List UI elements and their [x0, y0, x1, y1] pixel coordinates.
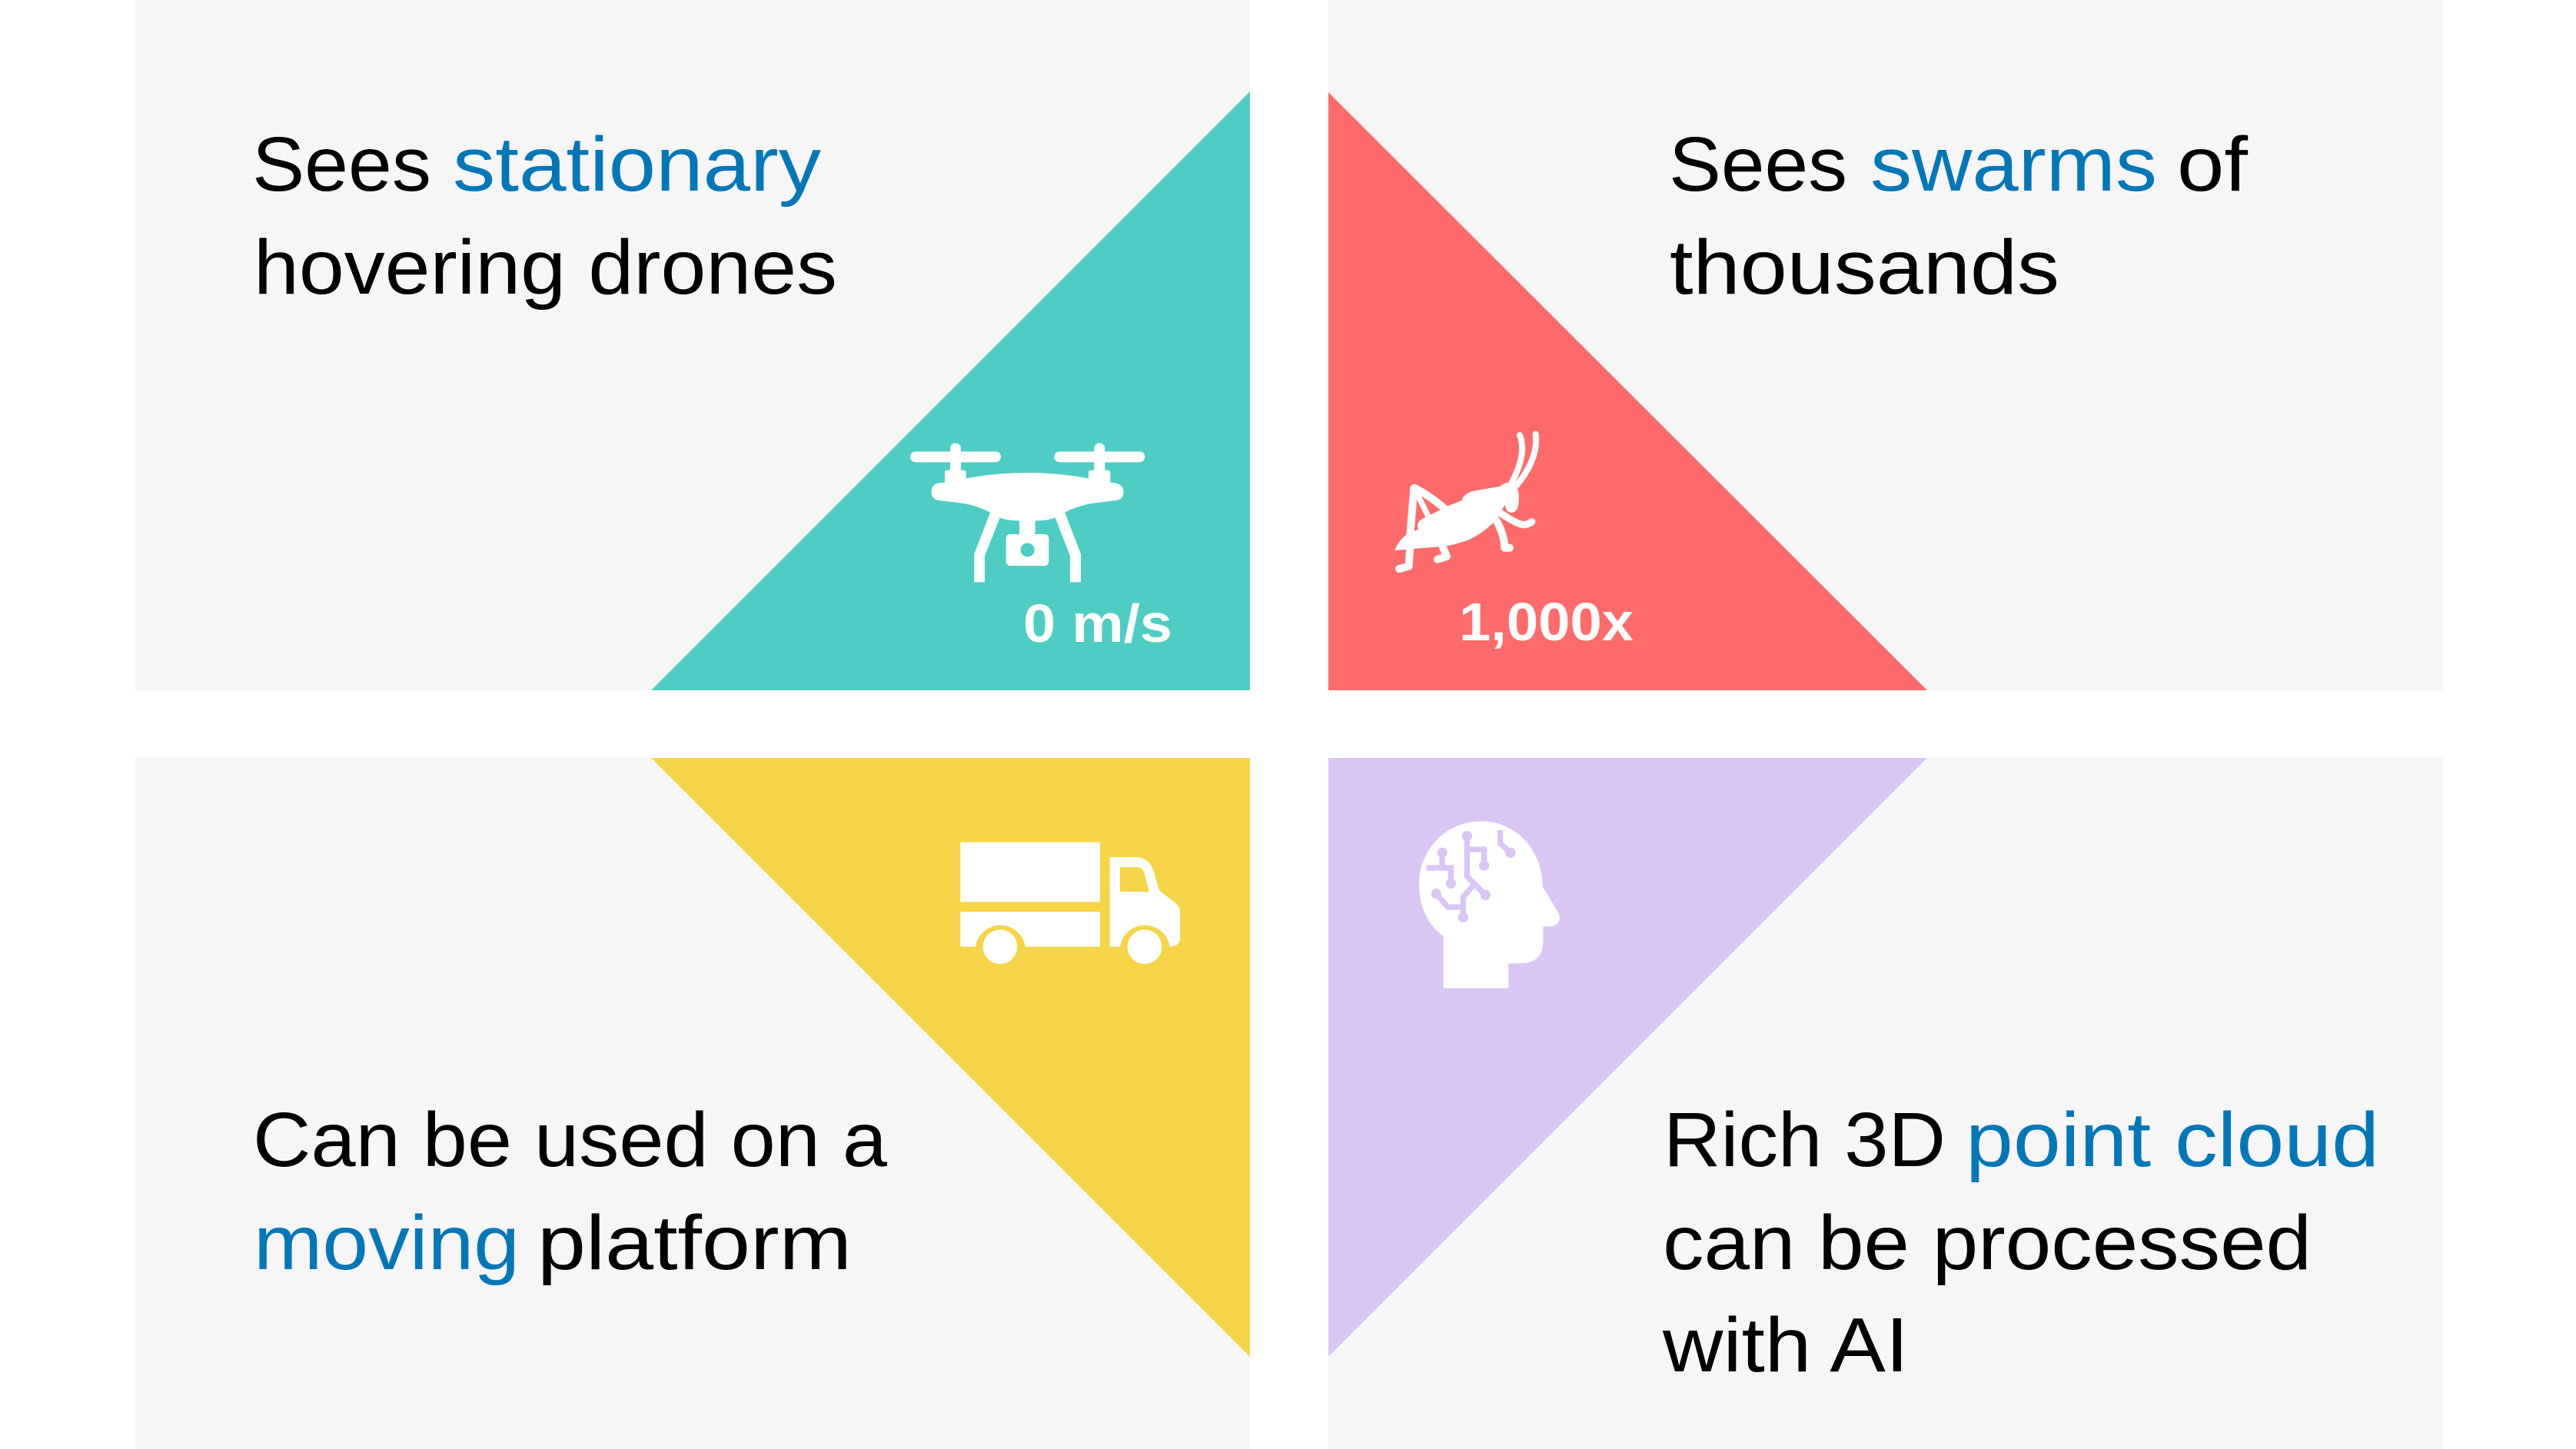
panel: moving platform — [135, 758, 1250, 1449]
panel background: bottom left — [135, 758, 1250, 1449]
panel: stationary drones — [135, 0, 1250, 690]
panel background: top left — [135, 0, 1250, 690]
text: rich 3D point cloud can be processed with AI: with AI — [1662, 1302, 1909, 1388]
text: rich 3D point cloud can be processed with AI: can be processed — [1663, 1200, 2312, 1286]
panel: point cloud with AI — [1328, 758, 2443, 1449]
label: 0 m/s: 0 m/s — [1023, 593, 1172, 653]
panel background: top right — [1328, 0, 2443, 690]
text: can be used on a moving platform: moving — [254, 1200, 520, 1286]
text: sees swarms of thousands — [1669, 121, 2248, 311]
text: rich 3D point cloud can be processed with AI: point cloud — [1966, 1097, 2379, 1183]
text: can be used on a moving platform: Can be used on a — [253, 1097, 887, 1183]
icon: AI head — [1419, 821, 1560, 989]
text: sees stationary hovering drones: Sees — [252, 121, 431, 208]
text: sees swarms of thousands: swarms — [1870, 121, 2157, 208]
text: rich 3D point cloud can be processed with AI: Rich 3D — [1664, 1097, 1946, 1183]
text: sees stationary hovering drones: hovering drones — [254, 224, 837, 311]
text: sees swarms of thousands: thousands — [1670, 224, 2059, 311]
label: 1,000x: 1,000x — [1459, 592, 1634, 652]
panel: swarms — [1328, 0, 2443, 690]
text: can be used on a moving platform — [253, 1097, 887, 1286]
red triangle — [1328, 92, 1927, 690]
text: sees swarms of thousands: Sees — [1669, 121, 1847, 208]
icon: grasshopper — [1394, 434, 1536, 569]
text: rich 3D point cloud can be processed with AI — [1662, 1097, 2379, 1388]
panel background: bottom right — [1328, 758, 2443, 1449]
icon: truck — [960, 842, 1180, 964]
icon: drone — [910, 443, 1145, 582]
text: sees stationary hovering drones — [252, 121, 837, 311]
purple triangle — [1328, 758, 1927, 1357]
text: can be used on a moving platform: platform — [537, 1200, 852, 1286]
text: sees swarms of thousands: of — [2177, 121, 2248, 208]
teal triangle — [651, 91, 1250, 690]
yellow triangle — [651, 758, 1250, 1357]
text: sees stationary hovering drones: stationary — [453, 121, 821, 208]
